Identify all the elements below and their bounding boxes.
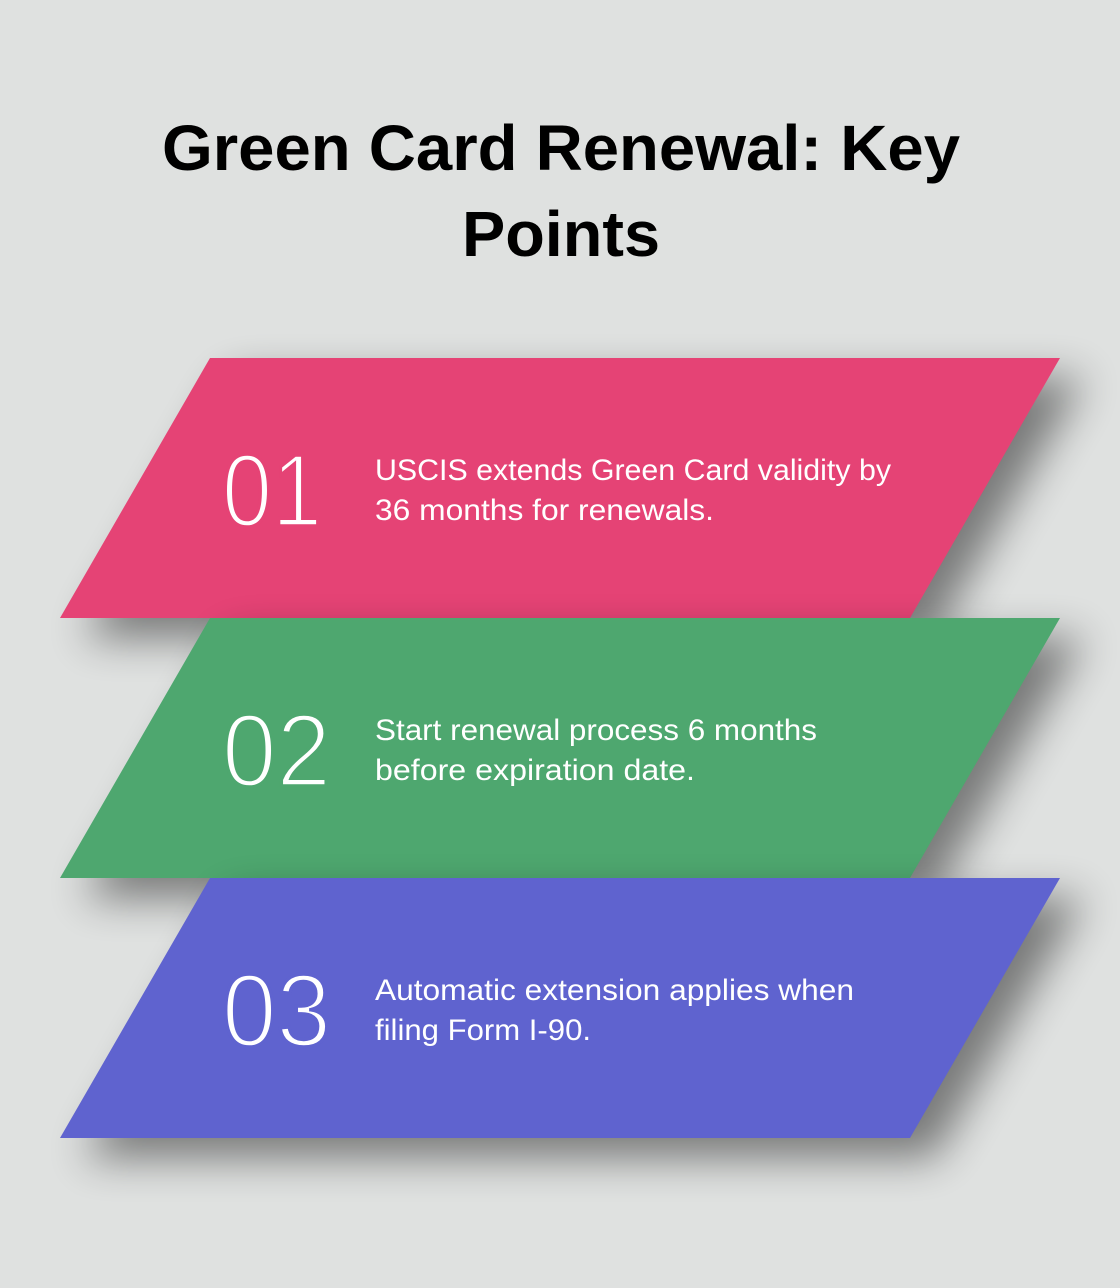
text: point 02: before expiration date. [375, 754, 695, 787]
number 03: 03 [222, 953, 331, 1068]
text: point 02 [375, 714, 817, 787]
title [162, 112, 960, 270]
text: point 01: 36 months for renewals. [375, 494, 714, 527]
panel: point 02 [60, 618, 1084, 898]
text: point 01 [375, 454, 891, 527]
number 02: 02 [222, 693, 331, 808]
title: Points [462, 198, 660, 270]
text: point 03: Automatic extension applies when [375, 974, 854, 1007]
number 01: 01 [222, 433, 322, 548]
title: Green Card Renewal: Key [162, 112, 960, 184]
text: point 03: filing Form I-90. [375, 1014, 591, 1047]
text: point 03 [375, 974, 854, 1047]
text: point 02: Start renewal process 6 months [375, 714, 817, 747]
panel: point 03 [60, 878, 1084, 1158]
panel: point 01 [60, 358, 1084, 638]
text: point 01: USCIS extends Green Card validity by [375, 454, 891, 487]
